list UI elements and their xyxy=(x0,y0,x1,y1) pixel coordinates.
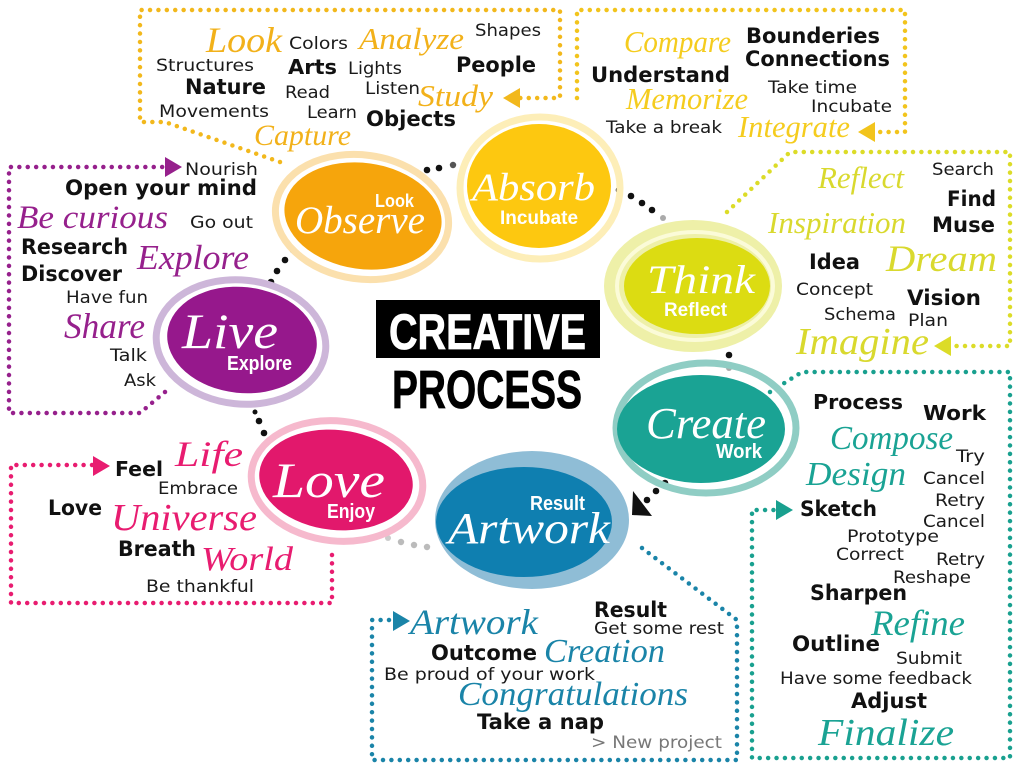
panel: absorb words xyxy=(577,10,905,144)
panel: think words: Find xyxy=(947,187,996,211)
panel: love words: Feel xyxy=(115,457,163,481)
panel: live words: Go out xyxy=(190,213,253,233)
panel: love words: World xyxy=(201,541,294,578)
panel: observe words: Listen xyxy=(365,79,420,99)
panel: observe words: Look xyxy=(205,20,283,60)
panel: observe words: Capture xyxy=(254,119,351,152)
panel: observe words: Lights xyxy=(348,59,402,79)
stage: artwork xyxy=(435,451,629,589)
panel: think words: Reflect xyxy=(817,160,905,195)
panel: absorb words: Memorize xyxy=(625,81,748,116)
panel: think words: Inspiration xyxy=(767,205,906,240)
panel: observe words: Shapes xyxy=(475,21,541,41)
stage: observe: Observe xyxy=(295,199,425,242)
panel: observe words: Read xyxy=(285,83,330,103)
panel: love words: Breath xyxy=(118,537,196,561)
title: PROCESS xyxy=(392,360,582,420)
panel: observe words: Nature xyxy=(185,75,266,99)
panel: observe words: People xyxy=(456,53,536,77)
panel: love words: Universe xyxy=(111,497,257,539)
panel: artwork words: > New project xyxy=(591,733,722,753)
panel: live words: Share xyxy=(64,306,145,346)
title: CREATIVE xyxy=(389,304,586,360)
panel: live words: Open your mind xyxy=(65,176,257,200)
panel: artwork words: Take a nap xyxy=(477,710,604,734)
panel: live words: Be curious xyxy=(17,200,168,236)
panel: observe words: Structures xyxy=(156,56,254,76)
panel: absorb words: Incubate xyxy=(811,97,892,117)
connector dots between stages xyxy=(252,160,732,550)
panel: live words: Explore xyxy=(136,238,249,277)
title xyxy=(376,300,600,420)
panel: artwork words: Artwork xyxy=(408,602,539,642)
panel: think words: Imagine xyxy=(795,321,929,363)
arrow: create to artwork xyxy=(632,491,652,516)
panel: artwork words: Congratulations xyxy=(458,676,688,713)
panel: create words: Sharpen xyxy=(810,581,907,605)
panel: think words: Plan xyxy=(908,311,948,331)
panel: create words: Adjust xyxy=(851,689,927,713)
panel: create words: Compose xyxy=(830,420,953,457)
panel: think words: Schema xyxy=(824,305,896,325)
panel: artwork words: Get some rest xyxy=(594,619,724,639)
panel: observe words: Arts xyxy=(288,55,337,79)
panel: observe words: Study xyxy=(418,78,493,113)
panel: create words: Correct xyxy=(836,545,904,565)
panel: observe words: Analyze xyxy=(357,21,464,56)
panel: artwork words: Result xyxy=(594,598,667,622)
panel: think words: Idea xyxy=(809,250,860,274)
panel: create words: Retry xyxy=(936,550,985,570)
panel: create words: Refine xyxy=(870,603,965,643)
panel: create words: Cancel xyxy=(923,512,985,532)
stage: live: Explore xyxy=(227,353,292,375)
stage: artwork: Result xyxy=(530,493,585,515)
stage: live xyxy=(150,271,332,413)
panel: think words: Dream xyxy=(885,239,997,280)
panel: observe words: Learn xyxy=(307,103,357,123)
stage: absorb xyxy=(460,117,620,259)
panel: create words: Outline xyxy=(792,632,880,656)
stage: create: Work xyxy=(716,441,763,463)
panel: artwork words: Outcome xyxy=(431,641,537,665)
panel: create words: Prototype xyxy=(847,527,939,547)
stage: create xyxy=(616,363,796,493)
panel: create words xyxy=(752,372,1010,758)
panel: love words: Love xyxy=(48,496,102,520)
stage: love: Love xyxy=(272,452,385,508)
panel: live words: Research xyxy=(21,235,128,259)
panel: absorb words: Integrate xyxy=(737,109,850,144)
panel: create words: Sketch xyxy=(800,497,877,521)
stage: observe: Look xyxy=(375,191,415,211)
panel: absorb words: Connections xyxy=(745,47,890,71)
panel: observe words xyxy=(140,10,560,162)
panel: create words: Work xyxy=(923,401,987,425)
stage: observe xyxy=(267,143,457,291)
stage: absorb: Incubate xyxy=(500,208,578,229)
panel: love words: Be thankful xyxy=(146,577,254,597)
panel: artwork words: Creation xyxy=(544,633,665,670)
panel: create words: Have some feedback xyxy=(780,669,972,689)
panel: create words: Cancel xyxy=(923,469,985,489)
panel: create words: Finalize xyxy=(817,712,954,754)
panel: observe words: Movements xyxy=(159,102,269,122)
stage: absorb: Absorb xyxy=(469,166,595,209)
stage: artwork: Artwork xyxy=(445,504,612,553)
stage: create: Create xyxy=(646,399,766,448)
panel: think words: Vision xyxy=(907,286,981,310)
panel: live words: Discover xyxy=(21,262,123,286)
panel: absorb words: Compare xyxy=(624,24,731,59)
panel: create words: Submit xyxy=(896,649,962,669)
panel: create words: Design xyxy=(805,456,906,493)
panel: observe words: Colors xyxy=(289,34,348,54)
panel: absorb words: Take a break xyxy=(605,118,722,138)
panel: think words: Search xyxy=(932,160,994,180)
panel: live words: Nourish xyxy=(185,160,258,180)
stage: think: Reflect xyxy=(664,300,728,321)
panel: create words: Retry xyxy=(935,491,985,511)
stage: think: Think xyxy=(647,257,756,302)
panel: live words: Have fun xyxy=(66,288,148,308)
panel: think words: Muse xyxy=(932,213,995,237)
panel: love words: Embrace xyxy=(158,479,238,499)
panel: create words: Reshape xyxy=(893,568,971,588)
panel: absorb words: Bounderies xyxy=(746,24,880,48)
stage: live: Live xyxy=(181,303,278,359)
panel: live words: Ask xyxy=(124,371,156,391)
panel: artwork words: Be proud of your work xyxy=(384,665,595,685)
stage: love: Enjoy xyxy=(327,501,376,523)
panel: artwork words xyxy=(372,548,737,760)
stage: think xyxy=(604,220,782,352)
panel: create words: Process xyxy=(813,390,903,414)
panel: absorb words: Understand xyxy=(591,63,730,87)
panel: think words xyxy=(727,152,1010,363)
panel: observe words: Objects xyxy=(366,107,456,131)
panel: absorb words: Take time xyxy=(767,78,857,98)
stage: love xyxy=(245,412,429,550)
panel: love words xyxy=(11,434,332,603)
panel: create words: Try xyxy=(955,447,985,467)
panel: think words: Concept xyxy=(796,280,873,300)
panel: live words xyxy=(9,157,258,413)
panel: live words: Talk xyxy=(109,346,147,366)
panel: love words: Life xyxy=(174,434,243,474)
